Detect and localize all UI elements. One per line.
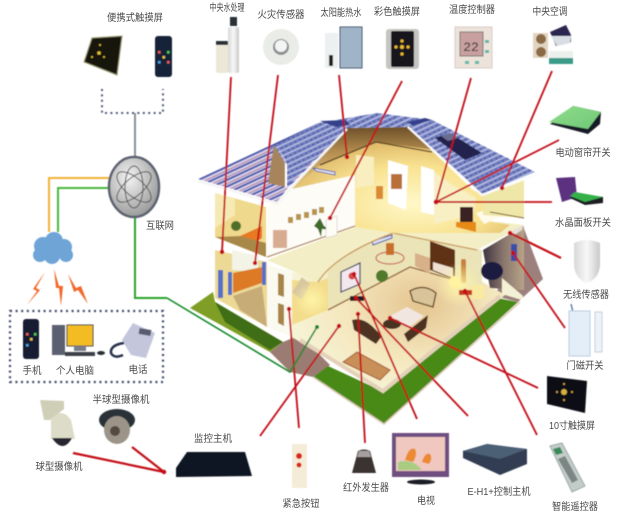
garage paving xyxy=(495,226,543,302)
sofa right xyxy=(404,315,428,342)
paving: front path xyxy=(270,335,330,377)
label: temp controller: 温度控制器 xyxy=(449,3,495,16)
icon: colour touchscreen xyxy=(386,29,419,69)
icon: solar water heater xyxy=(325,27,362,68)
dotted touch link xyxy=(102,89,163,113)
dotted device box xyxy=(10,311,163,382)
side lamp xyxy=(472,285,484,299)
label: solar: 太阳能热水 xyxy=(320,6,362,19)
handset buttons xyxy=(26,333,36,346)
label: tv: 电视 xyxy=(417,494,435,507)
globe body xyxy=(109,157,159,217)
skylight xyxy=(435,133,482,160)
glass window xyxy=(232,250,258,272)
label: dome cam: 半球型摄像机 xyxy=(92,393,150,406)
TV screen accent xyxy=(348,272,356,280)
connection lines (red) xyxy=(73,71,565,472)
garage interior xyxy=(483,226,524,290)
label: panic: 紧急按钮 xyxy=(282,497,320,510)
pillar window top xyxy=(278,273,284,297)
picture xyxy=(391,174,402,189)
icon: cloud xyxy=(33,232,73,264)
stairs glow xyxy=(294,282,330,318)
label: 10 inch: 10寸触摸屏 xyxy=(549,419,595,432)
attic shade xyxy=(292,127,435,189)
rug xyxy=(343,352,390,380)
TV console xyxy=(350,296,364,301)
icon: internet globe xyxy=(109,157,159,217)
label: phone: 电话 xyxy=(128,363,148,376)
green dot xyxy=(315,325,319,329)
touch buttons xyxy=(394,39,410,56)
label: door switch: 门磁开关 xyxy=(566,359,604,372)
lawn shadow xyxy=(215,302,283,350)
icon: portable phone xyxy=(155,36,172,77)
floor lamp xyxy=(449,276,461,288)
wall AC lower xyxy=(372,235,392,245)
garage car xyxy=(481,262,503,280)
left room top cream xyxy=(215,193,235,228)
skylight highlight xyxy=(441,133,458,141)
floor beige border xyxy=(300,296,500,391)
label: water treatment: 中央水处理 xyxy=(210,1,244,14)
wood trim xyxy=(490,212,524,218)
icon: water softener xyxy=(216,17,239,73)
upper interior xyxy=(292,127,510,233)
label: curtain switch: 电动窗帘开关 xyxy=(556,146,610,159)
partition xyxy=(434,172,476,224)
label: colour touch: 彩色触摸屏 xyxy=(374,5,420,18)
white door centre xyxy=(388,160,408,210)
roof: ridge xyxy=(318,113,432,128)
label: internet: 互联网 xyxy=(146,220,174,232)
sofa left xyxy=(352,319,382,344)
white exterior wall xyxy=(267,175,355,257)
wall picture large xyxy=(273,230,287,248)
upper floor slab xyxy=(267,222,524,282)
label: control host: E-H1+控制主机 xyxy=(468,485,530,498)
coffee table white xyxy=(390,307,424,328)
ornament ring xyxy=(376,252,404,264)
lawn: left xyxy=(190,292,283,352)
label: crystal switch: 水晶面板开关 xyxy=(555,216,611,229)
lower floor xyxy=(292,240,505,393)
counter xyxy=(233,267,262,293)
lamp glow xyxy=(436,263,480,307)
stairs block xyxy=(292,278,328,325)
green link to house xyxy=(135,217,167,298)
roof: left shingles xyxy=(198,123,347,202)
icon: personal computer xyxy=(52,325,105,356)
wall AC upper left xyxy=(313,168,335,175)
bedroom TV xyxy=(460,207,473,222)
wall pictures xyxy=(288,207,324,223)
cabinet panels xyxy=(433,262,453,278)
house cutaway illustration xyxy=(190,113,543,424)
label: IR: 红外发生器 xyxy=(343,481,389,494)
plant lower xyxy=(376,270,388,282)
icon: crystal panel switch xyxy=(556,177,603,205)
icon: panic button xyxy=(292,444,307,488)
icon: lightning bolts xyxy=(27,269,88,306)
green link xyxy=(58,188,110,232)
chair xyxy=(376,186,383,199)
dormer xyxy=(268,145,285,187)
label: wireless sensor: 无线传感器 xyxy=(563,288,609,301)
icon: thermostat: 22 xyxy=(463,40,479,55)
ridge vents xyxy=(320,118,432,127)
white pillar xyxy=(267,265,292,337)
icon: thermostat xyxy=(455,27,492,68)
left lower room xyxy=(215,250,267,327)
garage door xyxy=(502,278,523,300)
icon: E-H1+ control host xyxy=(463,444,527,475)
phone buttons xyxy=(158,51,170,64)
stair steps xyxy=(292,277,310,300)
icon: IR emitter xyxy=(352,450,376,473)
cabinet shelves xyxy=(415,253,430,274)
right upper wall xyxy=(483,180,524,218)
connection dots xyxy=(162,155,515,474)
grey antenna line xyxy=(134,113,136,157)
blue door sensor xyxy=(511,244,517,261)
wall plant xyxy=(314,218,331,237)
label: portable touch: 便携式触摸屏 xyxy=(107,11,163,24)
icon: curtain switch xyxy=(549,106,601,134)
network lines xyxy=(10,89,317,382)
left room plant xyxy=(231,221,241,231)
icon: handset xyxy=(23,319,39,359)
floor wedge xyxy=(233,286,267,327)
icon: 10-inch touchscreen xyxy=(547,376,587,413)
white door right xyxy=(421,166,434,215)
wood baseboard xyxy=(328,267,458,310)
icon: fire sensor xyxy=(263,29,299,65)
screen lights xyxy=(556,383,573,401)
ornament figure xyxy=(386,243,394,255)
icon: door magnet switch xyxy=(569,304,602,356)
thermostat buttons xyxy=(465,40,489,64)
atom orbits xyxy=(112,166,156,208)
orange link xyxy=(49,178,110,232)
label: pc: 个人电脑 xyxy=(56,364,94,377)
wall AC right xyxy=(510,225,523,236)
label: central AC: 中央空调 xyxy=(532,5,568,18)
label: monitor host: 监控主机 xyxy=(194,432,232,445)
bed xyxy=(476,206,506,224)
blue speakers xyxy=(218,262,266,298)
icon: speed dome camera xyxy=(40,400,75,446)
dormer white xyxy=(276,145,287,187)
bedroom stand xyxy=(456,222,476,232)
armchair xyxy=(410,287,436,307)
icon: monitoring host xyxy=(176,452,252,477)
lower back wall xyxy=(328,233,482,310)
dark green house link xyxy=(167,298,317,372)
side table xyxy=(459,290,473,295)
label: remote: 智能遥控器 xyxy=(552,500,598,513)
dark table xyxy=(383,319,401,329)
left upper room xyxy=(215,193,266,257)
tablet lights xyxy=(91,44,105,58)
cabinet xyxy=(430,241,455,280)
label: handset: 手机 xyxy=(22,364,42,377)
icon: central AC xyxy=(533,25,573,64)
statue xyxy=(461,259,466,283)
icon: television xyxy=(392,433,449,484)
roof: upper shingles xyxy=(270,123,347,186)
pillar window bottom xyxy=(278,303,284,326)
icon: smart remote xyxy=(550,443,585,492)
label: fire sensor: 火灾传感器 xyxy=(258,8,304,21)
roof white edge xyxy=(198,129,347,204)
lawn edge strip xyxy=(313,302,520,424)
icon: telephone xyxy=(111,323,155,358)
tulips xyxy=(405,448,416,462)
slab shade xyxy=(318,233,477,282)
left bedroom wall xyxy=(356,155,374,188)
remote keys xyxy=(558,456,578,483)
label: speed dome: 球型摄像机 xyxy=(36,460,82,473)
icon: portable tablet xyxy=(84,36,122,75)
room door panel xyxy=(326,216,337,238)
roof: right xyxy=(408,120,535,194)
icon: dome camera xyxy=(99,409,135,444)
left room orange bed xyxy=(240,226,262,245)
icon: wireless sensor xyxy=(574,240,600,283)
right roof white edge xyxy=(408,127,538,195)
lawn: front xyxy=(313,298,518,424)
left room floor xyxy=(215,236,266,257)
wall TV xyxy=(341,263,360,292)
rear beam xyxy=(320,142,432,165)
wall baseboard xyxy=(267,226,355,257)
